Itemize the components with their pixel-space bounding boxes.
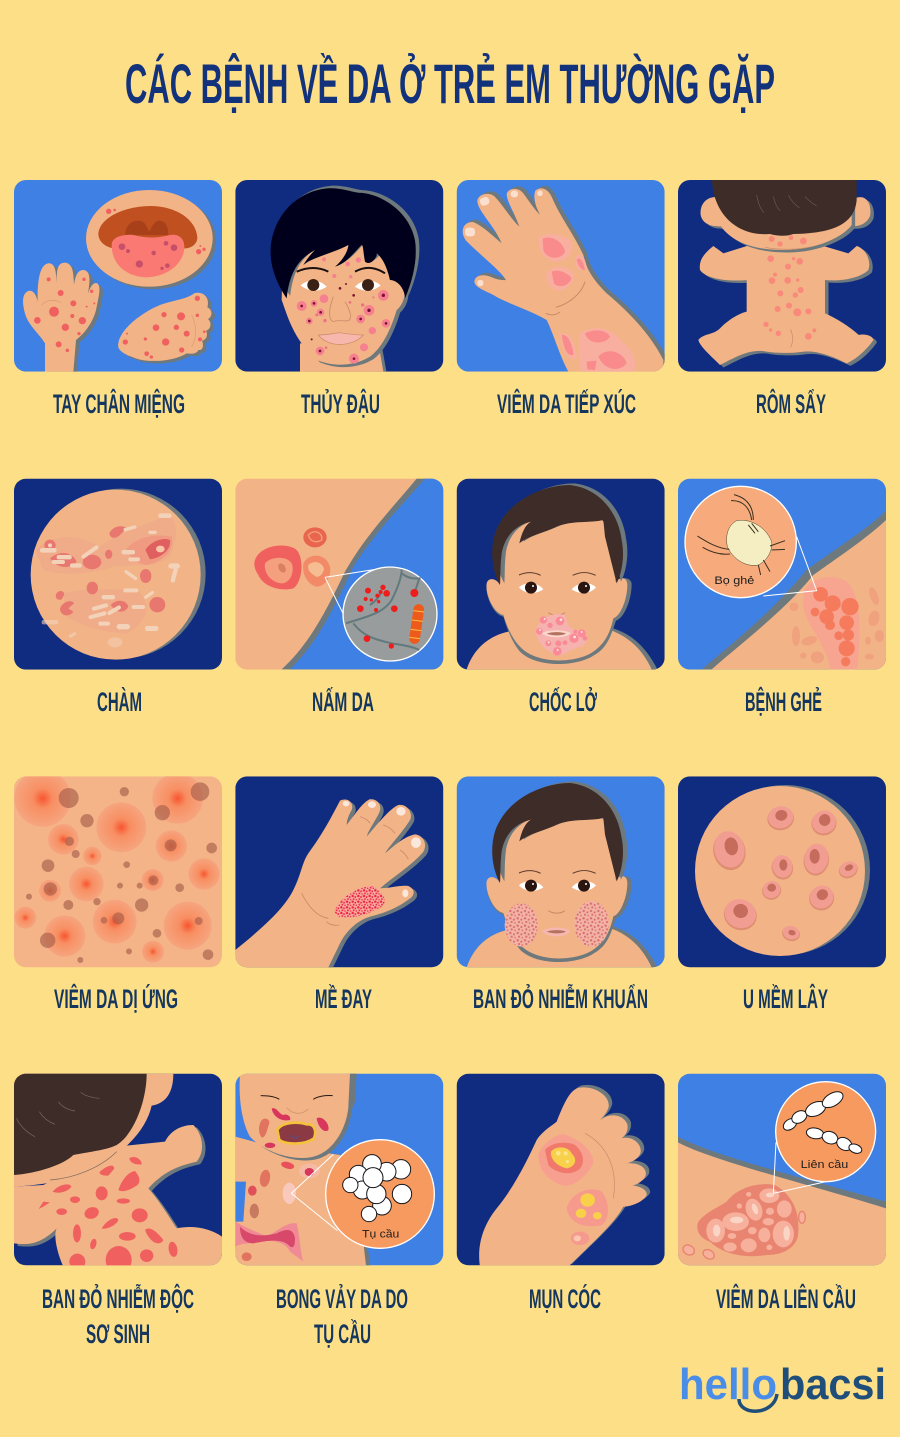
label: tay chân miệng: TAY CHÂN MIỆNG — [53, 388, 185, 419]
icon: streptococcus chains — [781, 1089, 863, 1155]
panel: nấm da — [235, 479, 443, 670]
rash around mouth — [535, 614, 587, 656]
panel: chốc lở — [457, 479, 665, 670]
label: nấm da: NẤM DA — [312, 686, 374, 717]
rash rings — [254, 527, 330, 589]
label: viêm da dị ứng: VIÊM DA DỊ ỨNG — [54, 983, 178, 1014]
panel: u mềm lây — [678, 776, 886, 967]
label: thủy đậu: THỦY ĐẬU — [301, 387, 380, 419]
panel: rôm sẩy — [678, 180, 886, 372]
label: chàm: CHÀM — [97, 686, 142, 717]
panel: chàm — [14, 479, 222, 670]
panel: ban đỏ nhiễm khuẩn — [457, 776, 665, 967]
label: mụn cóc: MỤN CÓC — [529, 1283, 601, 1314]
icon: mite — [697, 495, 785, 575]
label: viêm da tiếp xúc: VIÊM DA TIẾP XÚC — [497, 388, 636, 419]
label: ban đỏ nhiễm khuẩn: BAN ĐỎ NHIỄM KHUẨN — [473, 982, 648, 1014]
label: tụ cầu: Tụ cầu — [362, 1228, 399, 1240]
panel: mề đay — [235, 776, 443, 967]
logo: hellobacsi: hello — [679, 1360, 777, 1409]
panel: viêm da dị ứng — [14, 770, 222, 967]
label: liên cầu: Liên cầu — [801, 1159, 848, 1171]
panel: tay chân miệng — [14, 180, 222, 372]
label: tụ cầu: TỤ CẦU — [314, 1318, 371, 1349]
panel: thủy đậu — [235, 180, 443, 372]
panel: bệnh ghẻ — [678, 479, 886, 670]
label: rôm sẩy: RÔM SẨY — [756, 388, 826, 419]
panel: mụn cóc — [457, 1074, 665, 1267]
panel: ban đỏ nhiễm độc sơ sinh — [14, 1074, 222, 1274]
label: sơ sinh: SƠ SINH — [86, 1319, 150, 1349]
icon: staph cluster — [343, 1155, 412, 1222]
label: bong vảy da do: BONG VẢY DA DO — [276, 1282, 408, 1314]
logo: hellobacsi: bacsi — [780, 1360, 886, 1409]
logo: hellobacsi — [679, 1360, 886, 1411]
label: ban đỏ nhiễm độc: BAN ĐỎ NHIỄM ĐỘC — [42, 1282, 194, 1314]
panel: viêm da liên cầu — [678, 1074, 886, 1265]
panel: viêm da tiếp xúc — [457, 180, 665, 373]
label: u mềm lây: U MỀM LÂY — [743, 983, 828, 1014]
label: bệnh ghẻ: BỆNH GHẺ — [745, 685, 822, 717]
label: bọ ghẻ: Bọ ghẻ — [714, 575, 754, 587]
label: chốc lở: CHỐC LỞ — [529, 685, 597, 717]
panel: bong vảy da do tụ cầu — [235, 1074, 443, 1265]
label: mề đay: MỀ ĐAY — [315, 983, 372, 1014]
